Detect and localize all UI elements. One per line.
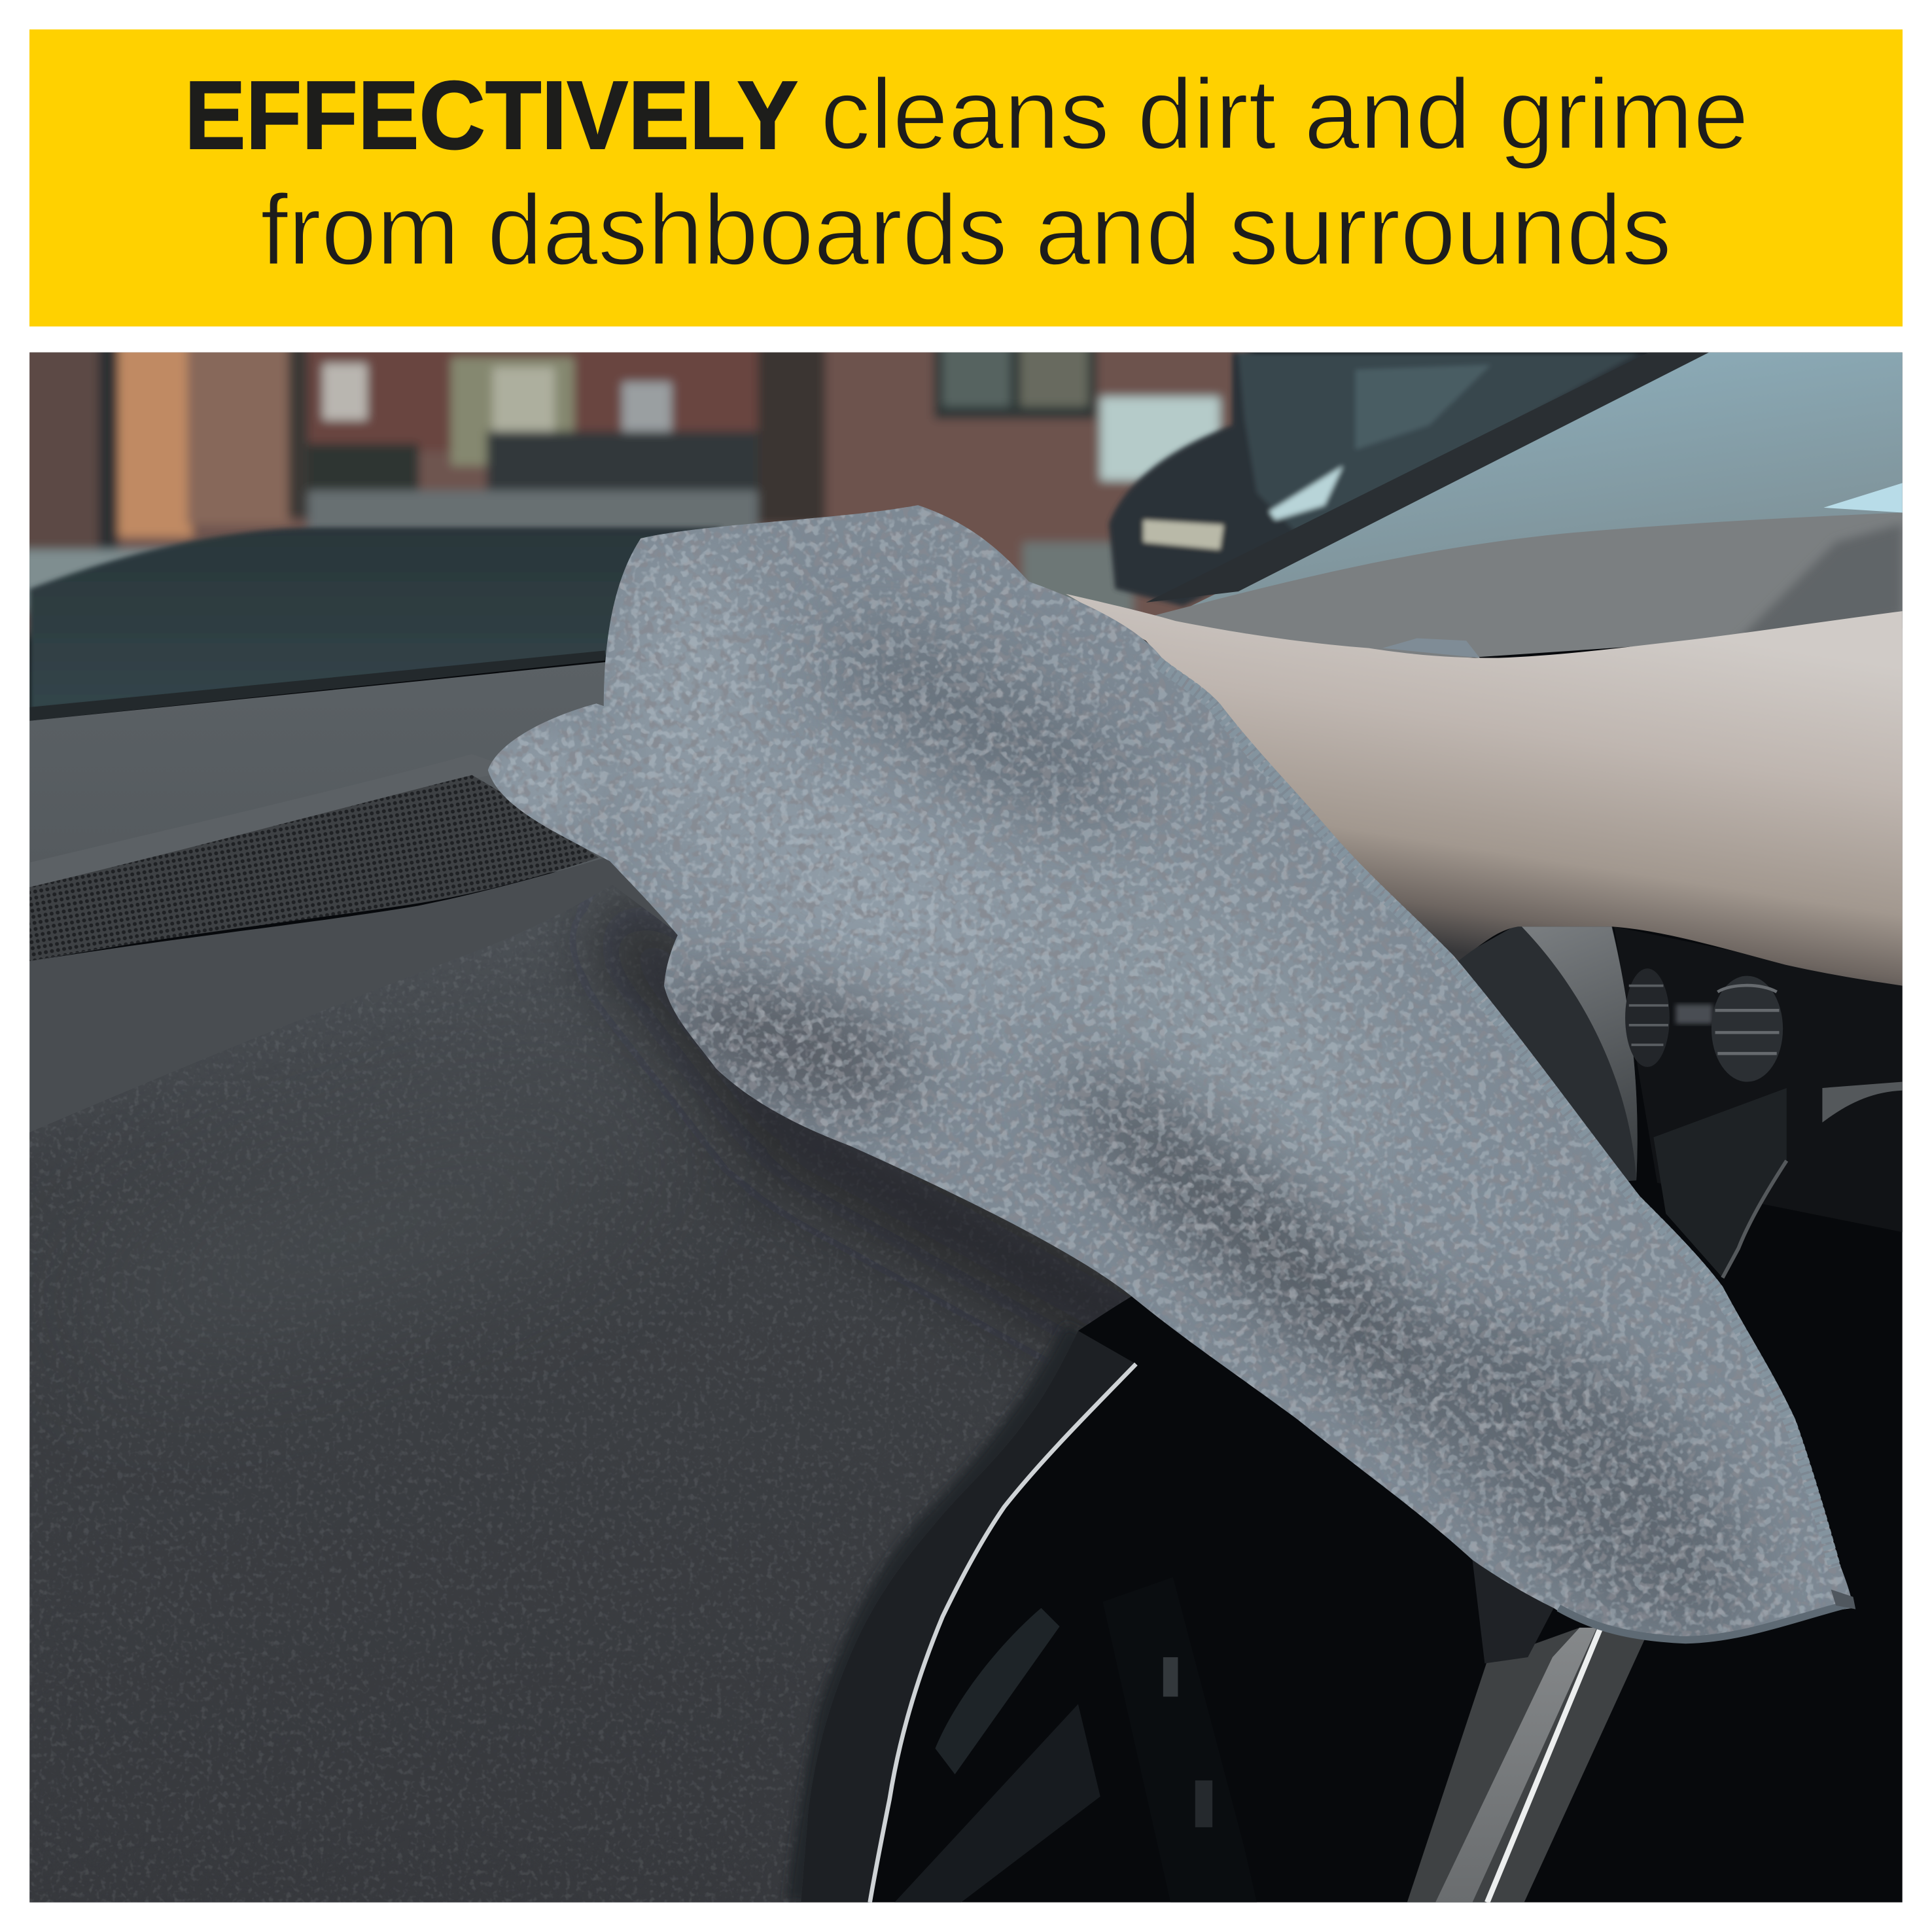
lower hem [1558, 1604, 1848, 1640]
dark band between dash edge and chrome [788, 1331, 1136, 1903]
wiper seal line [29, 650, 605, 721]
stalk plate [1653, 1088, 1787, 1278]
parked van seen through windscreen [1109, 353, 1713, 606]
leather grain and shading [29, 862, 1232, 1910]
light blue pillar [1170, 353, 1903, 616]
steering wheel rim behind towel [1441, 924, 1638, 1183]
towel fold shadow [1473, 1560, 1554, 1663]
photo: towel wiping car dashboard [17, 340, 1903, 1910]
lower vent [894, 1704, 1100, 1903]
side window glimpse [1823, 483, 1903, 512]
headline line 2: from dashboards and surrounds [260, 174, 1672, 286]
upper vent [935, 1608, 1060, 1774]
dark panel [1614, 926, 1903, 1232]
speaker grille [29, 775, 599, 961]
trim light stripe [1435, 1628, 1597, 1903]
switch panel [1103, 1577, 1257, 1903]
dark pillar edge [1146, 353, 1709, 603]
trim highlight [1487, 1628, 1600, 1903]
wheel rim light edge [1522, 926, 1638, 1180]
switch indicator [1163, 1657, 1178, 1696]
forearm [1066, 594, 1903, 986]
knob left [1625, 968, 1670, 1067]
far dash shade [1725, 523, 1903, 653]
instrument cluster chrome arc [870, 1364, 1136, 1903]
knob right [1712, 976, 1783, 1082]
headline banner [29, 29, 1903, 326]
wheel rim dark [1441, 924, 1638, 1183]
grey microfibre cloth [480, 499, 1861, 1692]
main dashboard leather [29, 885, 1136, 1903]
far dash surface [1152, 512, 1903, 665]
cloth corner behind arm [1382, 639, 1480, 658]
cloth light and shade patches [487, 554, 1803, 1692]
chrome trim right [1407, 1628, 1645, 1903]
instrument cluster vents [894, 1577, 1257, 1903]
switch indicator lower [1195, 1780, 1212, 1827]
windscreen dash reflection left [29, 527, 722, 711]
street background with brick houses [17, 340, 1250, 636]
regular text line 1: cleans dirt and grime [820, 58, 1749, 170]
stitched hem [1157, 661, 1835, 1568]
cloth base [488, 505, 1853, 1642]
plate edge highlight [1723, 1161, 1787, 1278]
dashboard top surface [29, 661, 610, 961]
right hand side controls [1614, 926, 1903, 1278]
right bracket [1822, 1082, 1903, 1123]
hem corner tip [1831, 1589, 1855, 1609]
grille surround strip [29, 754, 518, 890]
headline line 1 [184, 58, 1749, 170]
windscreen pillar and dash far side [1146, 353, 1903, 665]
cloth weave texture [480, 499, 1861, 1645]
knob stem [1676, 1004, 1713, 1024]
lower dash panel [29, 856, 690, 1140]
trim panel [1407, 1628, 1645, 1903]
banner background [29, 29, 1903, 326]
photo base [29, 353, 1903, 1903]
bold word: EFFECTIVELY [184, 61, 798, 169]
